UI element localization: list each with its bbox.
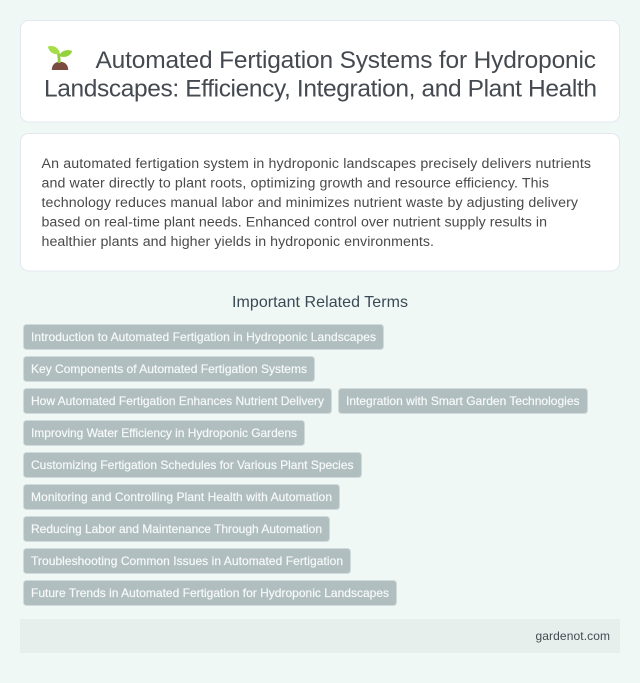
- panel: related terms tags: [24, 324, 588, 606]
- tag: troubleshooting: Troubleshooting Common Issues in Automated Fertigation: [31, 554, 343, 568]
- tag: future trends: [24, 580, 396, 606]
- heading: related terms: Important Related Terms: [232, 294, 408, 311]
- tag: labor and maintenance: [24, 516, 330, 542]
- tag: smart garden integration: [338, 388, 588, 414]
- tag: labor and maintenance: Reducing Labor and Maintenance Through Automation: [31, 522, 322, 536]
- tag: plant health: Monitoring and Controlling Plant Health with Automation: [31, 490, 332, 504]
- tag: future trends: Future Trends in Automated Fertigation for Hydroponic Landscapes: [31, 586, 389, 600]
- title: Landscapes: Efficiency, Integration, and Plant Health: [44, 76, 597, 102]
- text block: description: based on real-time plant needs. Enhanced control over nutrient supply results in: [42, 214, 547, 230]
- text block: description: An automated fertigation system in hydroponic landscapes precisely delivers nutrients: [42, 156, 591, 172]
- text block: description: technology reduces manual labor and minimizes nutrient waste by adjusting delivery: [42, 195, 579, 211]
- text block: description: [42, 156, 591, 250]
- tag: fertigation schedules: [24, 452, 362, 478]
- tag: nutrient delivery: [24, 388, 332, 414]
- text block: description: and water directly to plant roots, optimizing growth and resource efficiency. This: [42, 176, 549, 192]
- tag: key components: Key Components of Automated Fertigation Systems: [31, 362, 307, 376]
- tag: introduction: [24, 324, 384, 350]
- tag: water efficiency: Improving Water Efficiency in Hydroponic Gardens: [31, 426, 297, 440]
- tag: fertigation schedules: Customizing Fertigation Schedules for Various Plant Species: [31, 458, 354, 472]
- text block: description: healthier plants and higher yields in hydroponic environments.: [42, 234, 434, 250]
- title: Automated Fertigation Systems for Hydroponic: [96, 47, 596, 74]
- footer: gardenot.com: [536, 629, 610, 643]
- tag: nutrient delivery: How Automated Fertigation Enhances Nutrient Delivery: [31, 394, 324, 408]
- title: [44, 47, 597, 102]
- footer: [20, 619, 620, 653]
- tag: water efficiency: [24, 420, 304, 446]
- panel: description card: [20, 134, 620, 271]
- panel: header card: [20, 20, 620, 122]
- tag: introduction: Introduction to Automated Fertigation in Hydroponic Landscapes: [31, 330, 376, 344]
- tag: key components: [24, 356, 314, 382]
- icon: seedling: [48, 46, 72, 70]
- tag: troubleshooting: [24, 548, 350, 574]
- tag: plant health: [24, 484, 340, 510]
- tag: smart garden integration: Integration with Smart Garden Technologies: [346, 394, 580, 408]
